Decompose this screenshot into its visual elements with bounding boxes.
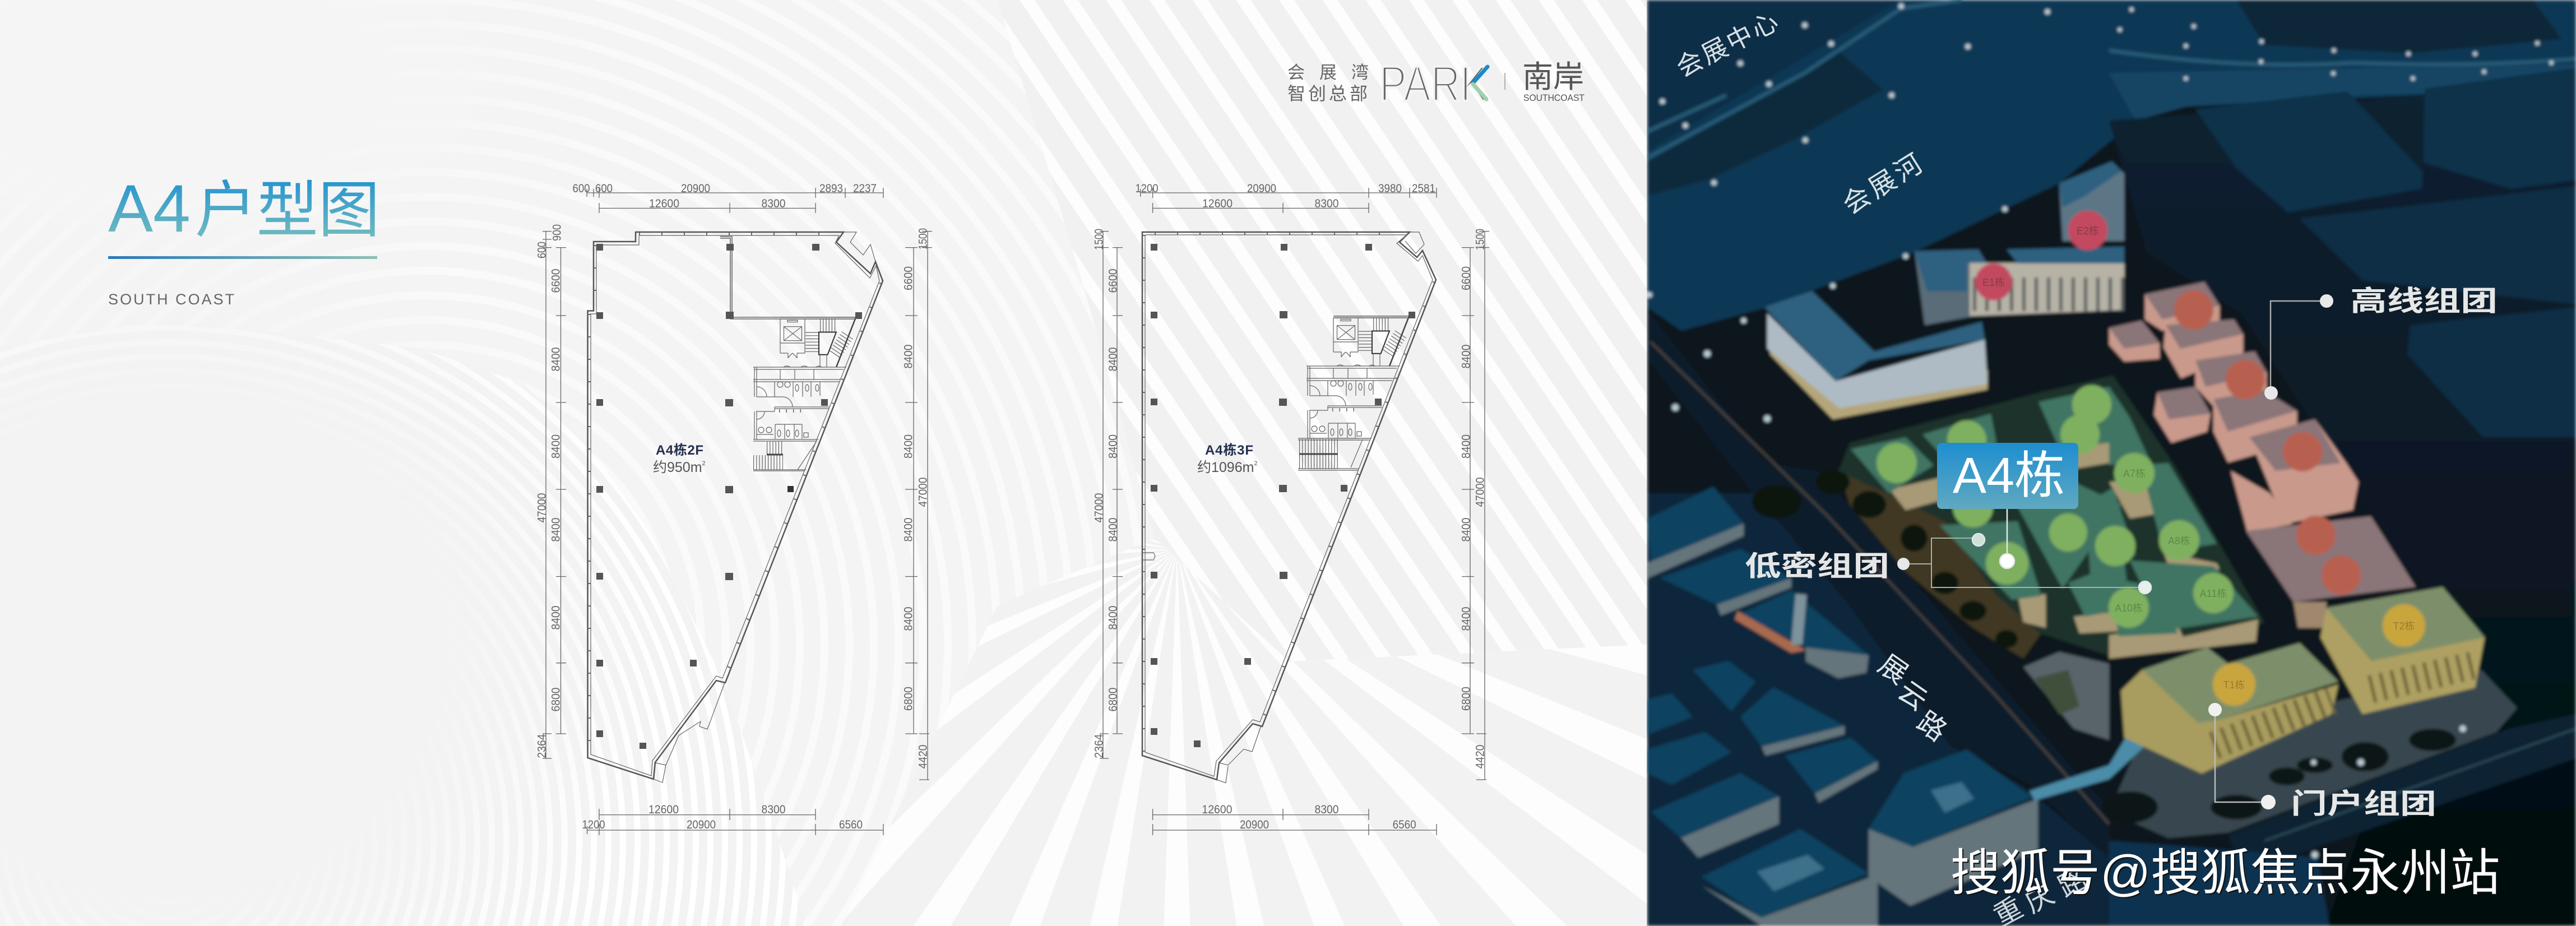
label: A4栋2F 约950m²: 2 (702, 460, 706, 467)
label: A4栋2F 约950m²: A4栋2F (656, 443, 703, 458)
watermark: 搜狐号@搜狐焦点永州站: 搜狐号@搜狐焦点永州站 (1950, 845, 2500, 901)
logo: 会展湾智创总部 PARK 南岸: PARK (1379, 55, 1488, 112)
dimension numbers 3F: 6800 (1106, 687, 1120, 712)
roof marker labels: A10栋 (2115, 603, 2143, 614)
dimension numbers 3F: 20900 (1247, 182, 1276, 195)
dimension numbers 2F: 2893 (819, 182, 843, 195)
roof marker labels: A7栋 (2123, 468, 2146, 479)
cluster label: 高线组团: 高线组团 (2350, 285, 2498, 317)
place label: 会展河: 会展河 (1838, 147, 1930, 220)
dimension numbers 3F: 3980 (1378, 182, 1402, 195)
logo: 会展湾智创总部 PARK 南岸: 智创总部 (1287, 84, 1370, 104)
dimension numbers 2F: 600 (536, 242, 548, 258)
dimension numbers 3F (1093, 182, 1486, 831)
dimension numbers 3F: 47000 (1093, 493, 1105, 522)
dimension numbers 3F: 12600 (1202, 197, 1233, 210)
roof marker labels: E2栋 (2077, 225, 2099, 237)
dimension numbers 2F: 8300 (761, 803, 786, 816)
cluster label: 门户组团: 门户组团 (2291, 788, 2436, 819)
columns 3F (1151, 244, 1415, 747)
callout: A4栋: A4栋 (1953, 448, 2065, 504)
dimension numbers 2F: 2364 (536, 734, 548, 758)
road label: 展云路: 云 (1892, 675, 1933, 716)
dimension numbers 2F: 8400 (549, 518, 563, 541)
dimension numbers 2F: 8400 (549, 605, 563, 630)
dimension numbers 3F: 6600 (1106, 269, 1120, 293)
dimension numbers 3F: 8400 (1460, 518, 1473, 541)
dimension numbers 3F: 1500 (1093, 229, 1105, 250)
background: white wave pattern (405, 0, 1647, 926)
road label: 重庆路: 路 (2053, 863, 2092, 903)
pink high-line cluster (2109, 282, 2359, 533)
low-rise district (1647, 493, 2109, 926)
core and washrooms 3F (1306, 316, 1409, 440)
river and far bank (1647, 0, 2576, 331)
green low-density cluster (1838, 376, 2264, 656)
outer walls 3F (1142, 232, 1436, 783)
logo: 会展湾智创总部 PARK 南岸 (1287, 55, 1584, 112)
dimension numbers 2F: 47000 (536, 493, 548, 522)
logo: 会展湾智创总部 PARK 南岸: 会展湾 (1287, 63, 1383, 82)
dimension numbers 2F: 600 (595, 182, 613, 195)
cluster label: 门户组团 (2208, 703, 2436, 819)
dimension numbers 2F: 47000 (917, 478, 929, 507)
dimension numbers 2F: 1500 (917, 228, 929, 249)
floor plan: A4栋3F (1093, 182, 1489, 835)
dimension lines 3F (1100, 188, 1489, 835)
place label: 会展中心: 会展中心 (1671, 6, 1785, 82)
dimension numbers 3F: 8300 (1315, 803, 1338, 816)
dimension numbers 2F: 6600 (902, 266, 915, 290)
label: A4栋2F 约950m²: 约950m (653, 460, 702, 475)
dimension numbers 3F: 2581 (1412, 182, 1435, 195)
aerial map panel (1647, 0, 2576, 926)
dimension numbers 2F: 12600 (648, 803, 679, 816)
roof marker labels: A8栋 (2168, 535, 2190, 547)
dimension numbers 3F: 8300 (1315, 197, 1338, 210)
dimension numbers 3F: 12600 (1202, 803, 1232, 816)
dimension numbers 3F: 1500 (1474, 229, 1486, 250)
label: A4栋3F 约1096m²: 约1096m (1197, 460, 1254, 475)
dimension numbers 2F: 8400 (902, 344, 915, 369)
floor plan: A4栋2F (536, 182, 932, 835)
dimension numbers 3F: 20900 (1240, 818, 1269, 831)
dimension numbers 3F: 8400 (1460, 434, 1473, 459)
road label: 展云路 (1873, 649, 1952, 747)
road label: 展云路: 展 (1873, 649, 1914, 690)
label: A4栋3F 约1096m²: 2 (1254, 460, 1258, 467)
upper waterfront buildings (1915, 251, 1971, 325)
roof marker labels: A11栋 (2200, 588, 2227, 599)
far right dark blocks (2109, 84, 2576, 926)
label: A4栋3F 约1096m² (1197, 443, 1258, 475)
columns 2F (596, 244, 862, 749)
cluster label: 低密组团: 低密组团 (1745, 550, 1889, 582)
dimension numbers 2F: 4420 (917, 744, 929, 769)
roof markers (1975, 211, 2107, 300)
dimension numbers 3F: 47000 (1474, 478, 1486, 507)
tan tree-lined band (1838, 468, 2043, 659)
dimension numbers 3F: 8400 (1106, 348, 1120, 371)
dimension numbers 2F: 20900 (687, 818, 716, 831)
roof marker labels (1982, 225, 2415, 691)
stair 2F (753, 442, 816, 471)
dimension numbers 2F: 8400 (549, 434, 563, 459)
outer walls 2F (587, 232, 883, 783)
dimension numbers 2F: 8400 (902, 434, 915, 459)
dimension numbers 3F: 6800 (1460, 687, 1473, 711)
label: A4栋2F 约950m² (653, 443, 706, 475)
dimension numbers 3F: 1200 (1136, 182, 1158, 195)
dimension numbers 3F: 4420 (1474, 744, 1486, 769)
aerial base illustration (1647, 0, 2576, 926)
L-shaped lakeside building (1770, 336, 1987, 419)
cluster label: 低密组团 (1745, 550, 1910, 582)
dimension numbers 3F: 2364 (1093, 734, 1105, 758)
dimension numbers 2F: 6800 (902, 687, 915, 711)
dimension numbers 2F: 8400 (902, 518, 915, 541)
roof marker labels: T1栋 (2223, 679, 2245, 691)
title underline (108, 256, 377, 259)
title: A4户型图: A4户型图 (108, 171, 380, 246)
leader: A4栋 (1903, 509, 2151, 594)
dimension numbers 2F: 20900 (681, 182, 710, 195)
dimension numbers 3F: 6560 (1393, 818, 1416, 831)
subtitle: SOUTH COAST: SOUTH COAST (108, 291, 234, 308)
road label: 重庆路: 庆 (2020, 878, 2059, 919)
dimension numbers 2F: 12600 (649, 197, 679, 210)
dimension numbers 2F: 900 (550, 224, 564, 241)
dimension numbers 2F: 2237 (853, 182, 877, 195)
dimension numbers 3F: 8400 (1106, 605, 1120, 630)
cluster label: 高线组团 (2264, 285, 2498, 400)
street lights (1647, 3, 2554, 858)
callout: A4栋 (1937, 443, 2078, 509)
dimension numbers 2F: 6560 (839, 818, 863, 831)
dimension numbers 2F: 8300 (761, 197, 786, 210)
road label: 展云路: 路 (1911, 706, 1952, 747)
logo: 会展湾智创总部 PARK 南岸: 南岸 (1522, 59, 1584, 94)
dimension numbers 2F: 6600 (549, 269, 563, 293)
road label: 重庆路 (1989, 863, 2092, 926)
roof marker labels: E1栋 (1982, 277, 2005, 288)
dimension numbers 2F: 8400 (902, 606, 915, 631)
dimension numbers 2F: 600 (573, 182, 590, 195)
stair 3F (1298, 438, 1369, 470)
logo: 会展湾智创总部 PARK 南岸: SOUTHCOAST (1523, 93, 1584, 103)
roof marker labels: T2栋 (2393, 621, 2415, 632)
dimension lines 2F (543, 188, 932, 835)
dimension numbers 2F (536, 182, 929, 831)
dimension numbers 3F: 6600 (1460, 266, 1473, 290)
label: A4栋3F 约1096m²: A4栋3F (1205, 443, 1253, 458)
core and washrooms 2F (753, 317, 856, 441)
gold gateway cluster (2109, 670, 2517, 838)
dimension numbers 3F: 8400 (1106, 434, 1120, 459)
dimension numbers 2F: 8400 (549, 348, 563, 371)
dimension numbers 3F: 8400 (1460, 344, 1473, 369)
dimension numbers 2F: 6800 (549, 687, 563, 712)
dimension numbers 3F: 8400 (1460, 606, 1473, 631)
dimension numbers 3F: 8400 (1106, 518, 1120, 541)
main road (1647, 310, 2109, 858)
dimension numbers 2F: 1200 (582, 818, 605, 831)
